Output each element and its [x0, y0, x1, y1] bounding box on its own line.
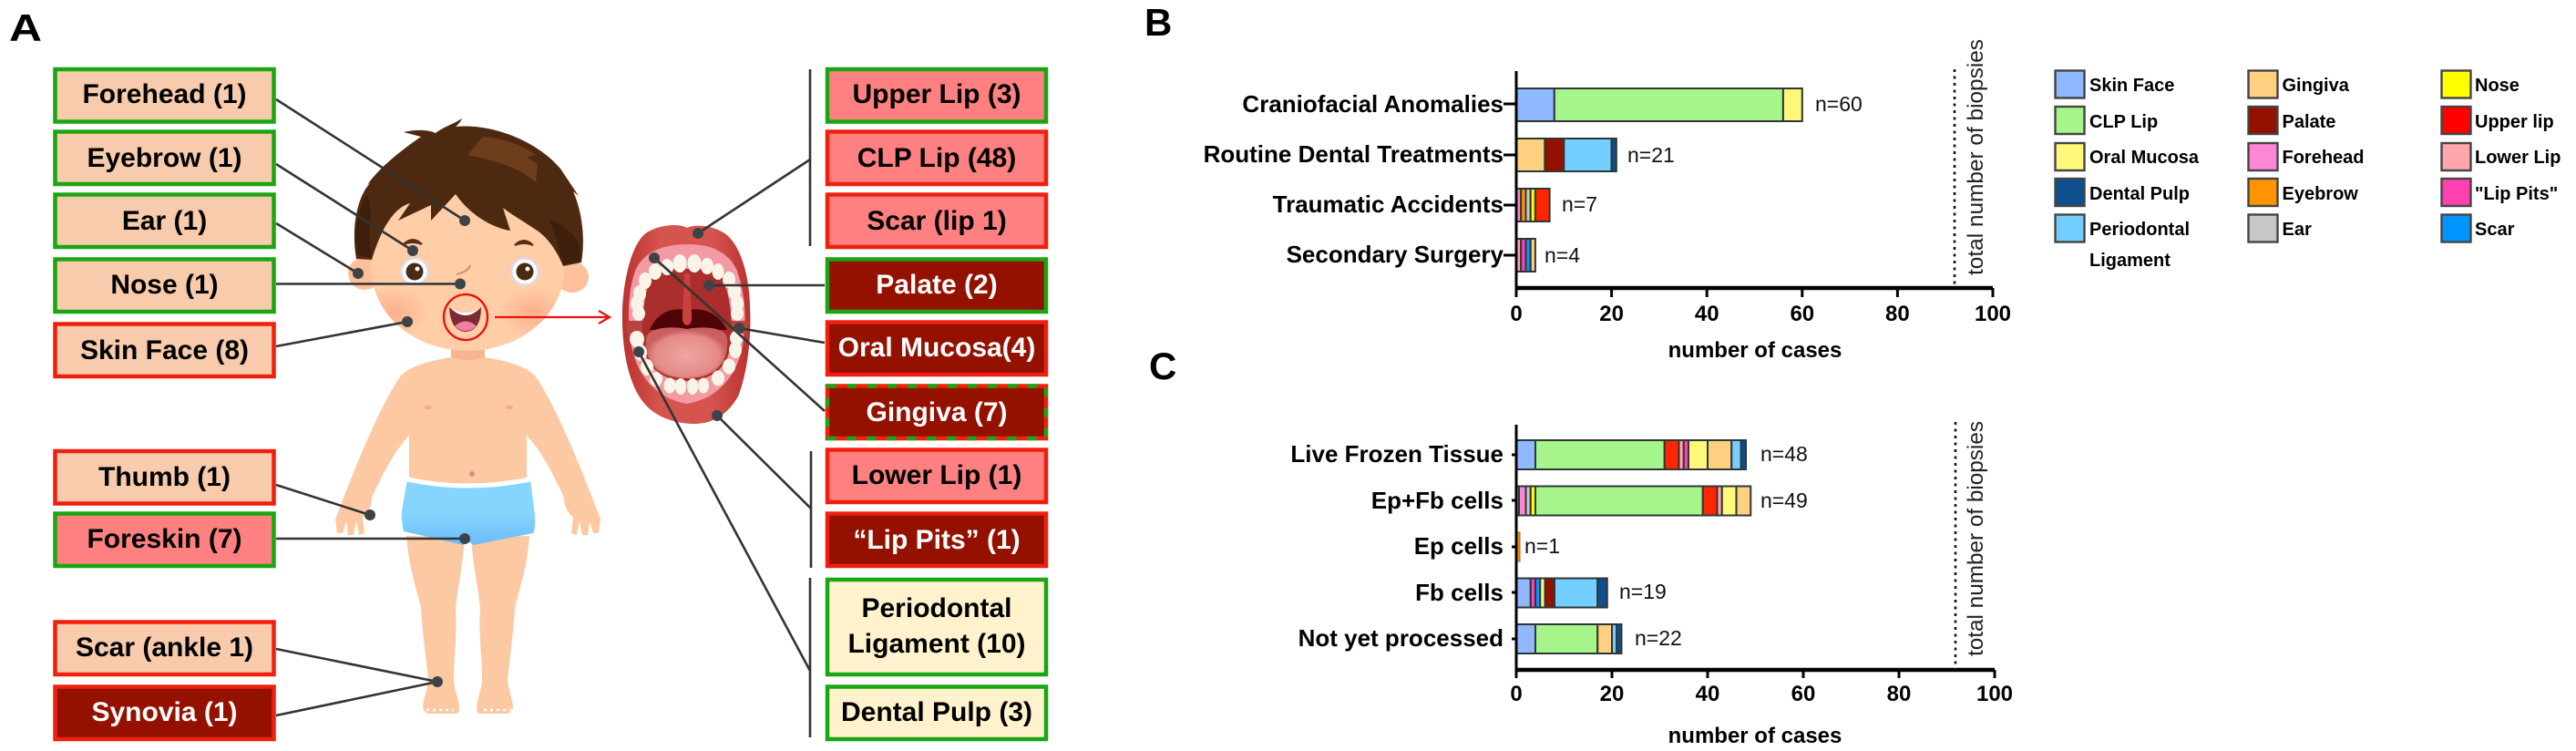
axes B	[1504, 71, 1993, 297]
label: Periodontal Ligament	[827, 580, 1046, 674]
tick labels C: 100	[1976, 682, 2013, 706]
label: Lower Lip: Lower Lip (1)	[852, 460, 1021, 490]
label: Eyebrow: Eyebrow (1)	[87, 143, 242, 173]
legend text: Oral Mucosa	[2089, 148, 2200, 168]
tick labels B: 40	[1695, 302, 1719, 326]
legend text: CLP Lip	[2089, 112, 2158, 132]
tick labels C	[1510, 682, 2013, 706]
threshold label C: total number of biopsies	[1964, 421, 1988, 656]
label: Periodontal Ligament: Periodontal	[861, 593, 1012, 623]
category labels C: Not yet processed	[1298, 624, 1504, 652]
label: Upper Lip: Upper Lip (3)	[853, 79, 1021, 109]
label: Forehead: Forehead (1)	[82, 79, 247, 109]
threshold label B: total number of biopsies	[1964, 39, 1988, 275]
label: Thumb: Thumb (1)	[98, 462, 231, 492]
legend text: Palate	[2282, 112, 2335, 132]
label: Foreskin: Foreskin (7)	[87, 524, 242, 554]
tick labels C: 60	[1791, 682, 1815, 706]
tick labels C: 20	[1600, 682, 1624, 706]
axis title B: number of cases	[1668, 338, 1842, 363]
label: Thumb	[55, 451, 273, 503]
bars: Secondary Surgery	[1516, 239, 1535, 272]
tick labels B: 60	[1790, 302, 1814, 326]
legend text: Ligament	[2089, 251, 2171, 271]
bars: Live Frozen Tissue	[1516, 440, 1746, 469]
label: Lip Pits	[827, 514, 1046, 566]
label: Foreskin	[55, 514, 273, 566]
label: Ear	[55, 195, 273, 247]
label: Eyebrow	[55, 131, 273, 184]
tick labels B: 80	[1885, 302, 1910, 326]
illustration: open mouth	[622, 225, 750, 424]
label: Ear: Ear (1)	[122, 206, 207, 236]
legend swatches	[2056, 71, 2471, 242]
category labels B	[1204, 90, 1504, 268]
bars: Ep cells	[1516, 532, 1520, 561]
category labels C	[1290, 440, 1504, 652]
n labels C: n=49	[1760, 489, 1808, 512]
label: Scar ankle: Scar (ankle 1)	[76, 633, 253, 663]
label: Palate	[827, 259, 1046, 312]
legend text: Eyebrow	[2282, 184, 2358, 204]
label: Skin Face: Skin Face (8)	[80, 335, 249, 365]
category labels C: Ep+Fb cells	[1371, 487, 1504, 514]
label: Forehead	[55, 69, 273, 122]
legend text: "Lip Pits"	[2475, 184, 2558, 204]
panel letter B: B	[1144, 1, 1172, 44]
tick labels B: 100	[1975, 302, 2011, 326]
tick labels B: 20	[1599, 302, 1624, 326]
bars: Not yet processed	[1516, 624, 1622, 653]
bars: Craniofacial Anomalies	[1516, 88, 1802, 121]
category labels B: Secondary Surgery	[1287, 241, 1504, 268]
legend text: Gingiva	[2282, 76, 2350, 96]
connector lines and marker dots: body sites	[276, 99, 470, 715]
panel letter A: A	[9, 6, 42, 49]
label: Periodontal Ligament: Ligament (10)	[847, 629, 1026, 659]
connector lines and marker dots: mouth sites	[633, 69, 825, 737]
label: Dental Pulp: Dental Pulp (3)	[841, 697, 1032, 727]
label: Gingiva	[827, 386, 1046, 438]
label: Synovia: Synovia (1)	[91, 697, 238, 727]
bar chart C: processing of samples	[1290, 421, 2013, 748]
n labels B: n=4	[1545, 243, 1580, 267]
n labels B: n=7	[1562, 192, 1597, 216]
tick labels C: 40	[1696, 682, 1719, 706]
category labels C: Ep cells	[1414, 532, 1504, 560]
label: Lower Lip	[827, 450, 1046, 502]
axes C	[1512, 425, 1995, 678]
label: Scar lip: Scar (lip 1)	[867, 206, 1007, 236]
category labels B: Craniofacial Anomalies	[1242, 90, 1504, 118]
tick labels B: 0	[1510, 302, 1523, 326]
threshold line C	[1955, 422, 1956, 670]
bars: Fb cells	[1516, 578, 1607, 607]
legend text: Ear	[2282, 220, 2312, 240]
label: Lip Pits: “Lip Pits” (1)	[853, 525, 1021, 555]
n labels C: n=48	[1760, 442, 1808, 466]
legend text: Nose	[2475, 76, 2520, 96]
label: Nose: Nose (1)	[110, 270, 219, 300]
label: Palate: Palate (2)	[876, 270, 998, 300]
tick labels C: 80	[1887, 682, 1911, 706]
label: Skin Face	[55, 324, 273, 376]
bars: Routine Dental Treatments	[1516, 139, 1616, 171]
label: CLP Lip	[827, 131, 1046, 184]
bar chart B: cases by clinical setting	[1204, 39, 2011, 363]
category labels C: Live Frozen Tissue	[1290, 440, 1504, 468]
n labels B: n=60	[1815, 92, 1863, 116]
category labels B: Traumatic Accidents	[1273, 190, 1504, 218]
legend text: Forehead	[2282, 148, 2365, 168]
threshold line B	[1954, 69, 1955, 288]
axis title C: number of cases	[1668, 724, 1842, 748]
illustration: child head	[348, 118, 589, 351]
label: Upper Lip	[827, 69, 1046, 122]
legend text: Lower Lip	[2475, 148, 2561, 168]
n labels B: n=21	[1627, 143, 1675, 167]
legend	[2056, 71, 2561, 271]
legend text: Periodontal	[2089, 220, 2190, 240]
label: Scar lip	[827, 195, 1046, 247]
legend text: Dental Pulp	[2089, 184, 2190, 204]
label: Gingiva: Gingiva (7)	[866, 397, 1008, 427]
legend text: Upper lip	[2475, 112, 2554, 132]
bars: Traumatic Accidents	[1516, 189, 1550, 221]
legend text: Scar	[2475, 220, 2515, 240]
label: Oral Mucosa	[827, 323, 1046, 375]
n labels C: n=1	[1524, 534, 1560, 558]
label: CLP Lip: CLP Lip (48)	[857, 143, 1016, 173]
teeth	[630, 254, 744, 395]
bars: Ep+Fb cells	[1516, 487, 1750, 516]
label: Nose	[55, 259, 273, 312]
label: Synovia	[55, 687, 273, 739]
n labels C: n=19	[1619, 580, 1667, 603]
n labels C: n=22	[1635, 626, 1682, 650]
category labels B: Routine Dental Treatments	[1204, 140, 1504, 168]
label: Dental Pulp	[827, 687, 1046, 739]
category labels C: Fb cells	[1415, 579, 1504, 606]
label: Oral Mucosa: Oral Mucosa(4)	[838, 333, 1035, 363]
illustration: child body	[335, 348, 600, 714]
n labels C	[1524, 442, 1808, 650]
tick labels C: 0	[1510, 682, 1523, 706]
panel letter C: C	[1149, 345, 1176, 387]
legend text: Skin Face	[2089, 76, 2174, 96]
tick labels B	[1510, 302, 2011, 326]
label: Scar ankle	[55, 622, 273, 674]
legend text	[2089, 76, 2561, 271]
callout: mouth circle and arrow	[444, 294, 610, 340]
n labels B	[1545, 92, 1863, 267]
